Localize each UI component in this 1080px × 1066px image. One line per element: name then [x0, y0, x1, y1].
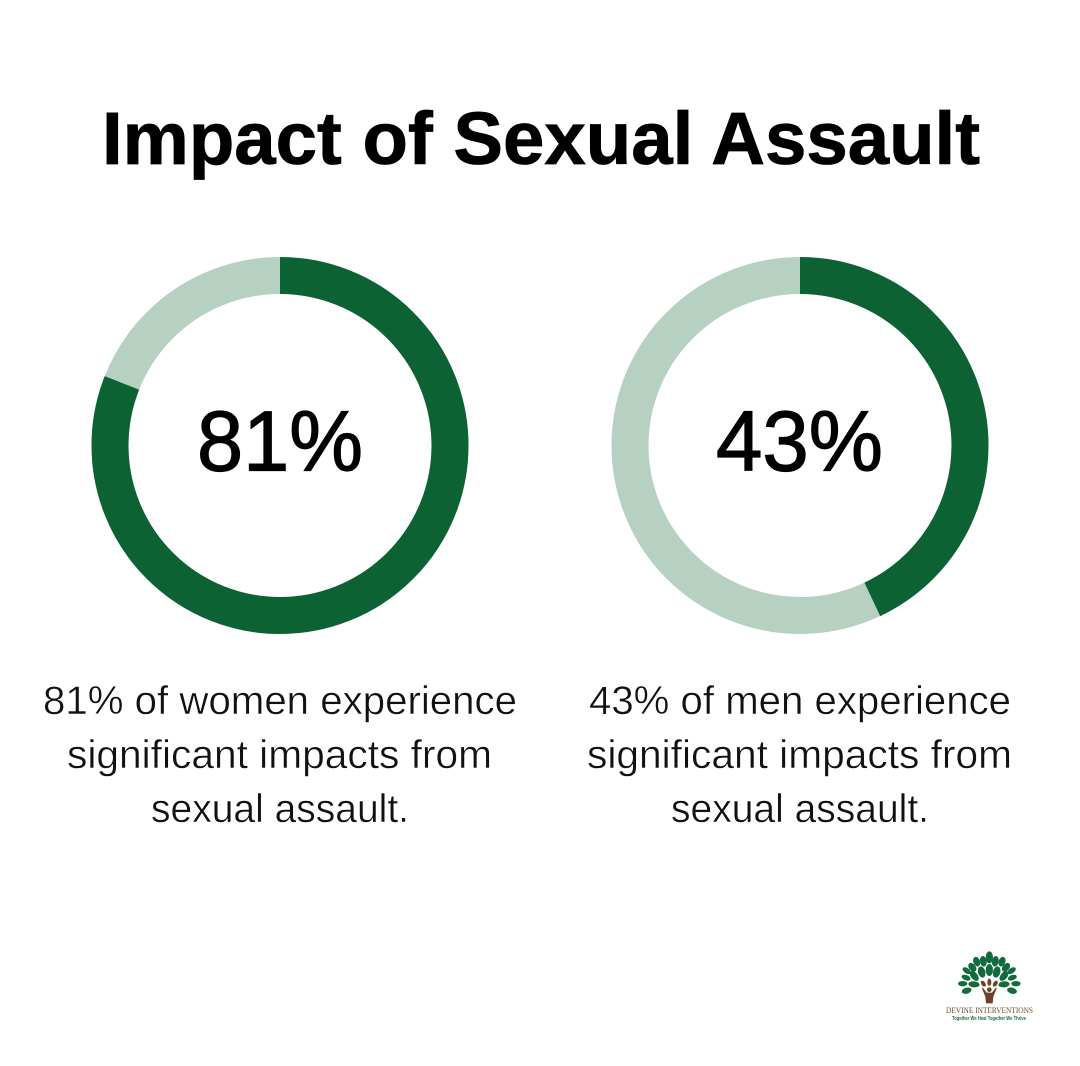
value: 81%: 81% [197, 394, 363, 490]
logo name: DEVINE INTERVENTIONS [946, 1006, 1033, 1015]
panel: men [587, 276, 1012, 831]
donut chart: women 81% [110, 276, 450, 616]
title: Impact of Sexual Assault [102, 97, 980, 180]
description: women: sexual assault. [151, 787, 409, 831]
value: 43%: 43% [716, 394, 883, 490]
description: women: significant impacts from [67, 733, 492, 777]
logo tagline: Together We Heal Together We Thrive [952, 1016, 1026, 1022]
description: women: 81% of women experience [43, 679, 517, 723]
logo: Devine Interventions [946, 951, 1033, 1022]
description: men: 43% of men experience [589, 679, 1011, 723]
icon: tree with person [958, 951, 1021, 1003]
description: men [587, 679, 1012, 831]
donut chart: men 43% [630, 276, 970, 616]
panel: women [43, 276, 517, 831]
description: men: sexual assault. [671, 787, 929, 831]
description: women [43, 679, 517, 831]
description: men: significant impacts from [587, 733, 1012, 777]
